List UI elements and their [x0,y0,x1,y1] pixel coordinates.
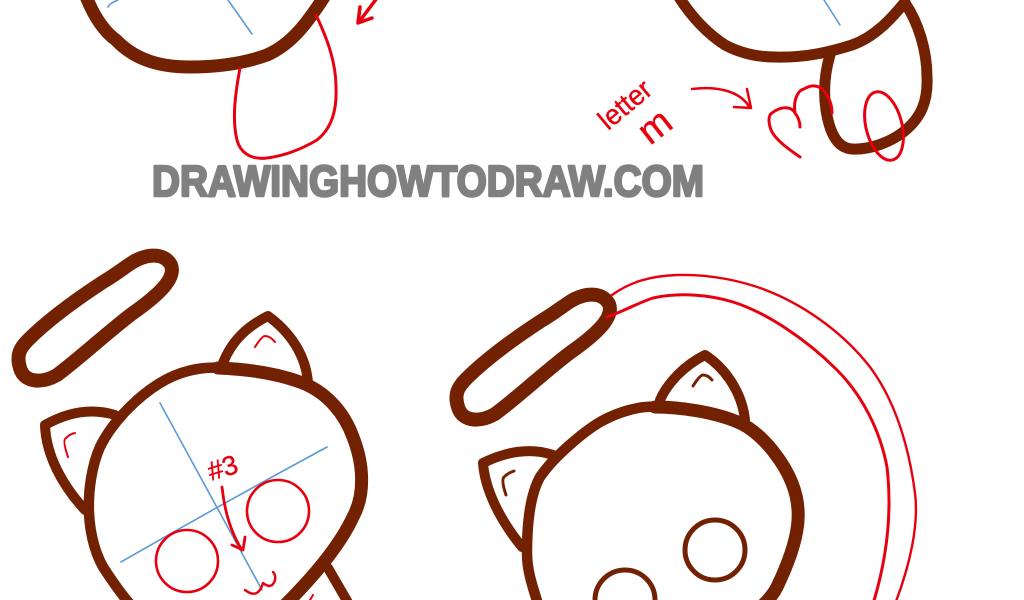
head outline, top right [677,0,905,57]
blue guide line, top right [824,0,840,25]
panel: step bottom right [456,275,916,600]
ear top, bottom right [660,355,745,420]
blue guide lines, top left [108,0,252,34]
step number: #3 [204,449,241,487]
handwritten note: letter m: m [630,101,680,153]
red body hint [310,595,313,600]
arrow: red pointer, top left [358,0,377,23]
head outline, bottom right [527,407,798,600]
arrow: points to letter m [692,88,751,108]
halo, bottom right [456,295,610,420]
ear left, bottom right [483,451,553,547]
red eye circle left [156,530,218,592]
ear top, bottom left [223,316,308,383]
eye circle left [595,570,655,600]
ear left, bottom left [45,412,115,510]
halo, bottom left [18,256,172,381]
panel: step top right [592,0,927,164]
handwritten note: letter m [592,73,680,153]
inner ear marks, bottom right [503,375,712,495]
eye circle right [685,520,745,580]
panel: step top left [85,0,377,158]
blue face guides [121,403,327,590]
red letter m paw [769,86,832,157]
red eye circle right [247,480,309,542]
handwritten note: letter m: letter [592,73,658,136]
red oval paw [858,88,910,164]
body outline, top right [825,3,927,149]
red mouth [245,572,275,594]
head outline, top left [85,0,326,67]
panel: step bottom left [18,256,362,600]
red body outline, top left [234,15,336,158]
watermark: site name: DRAWINGHOWTODRAW.COM [152,157,704,206]
body start, bottom left [328,568,350,600]
red inner ear marks, bottom left [64,336,275,457]
head outline, bottom left [89,368,362,600]
red connector lines [607,275,916,600]
arrow: down to nose [222,487,245,550]
